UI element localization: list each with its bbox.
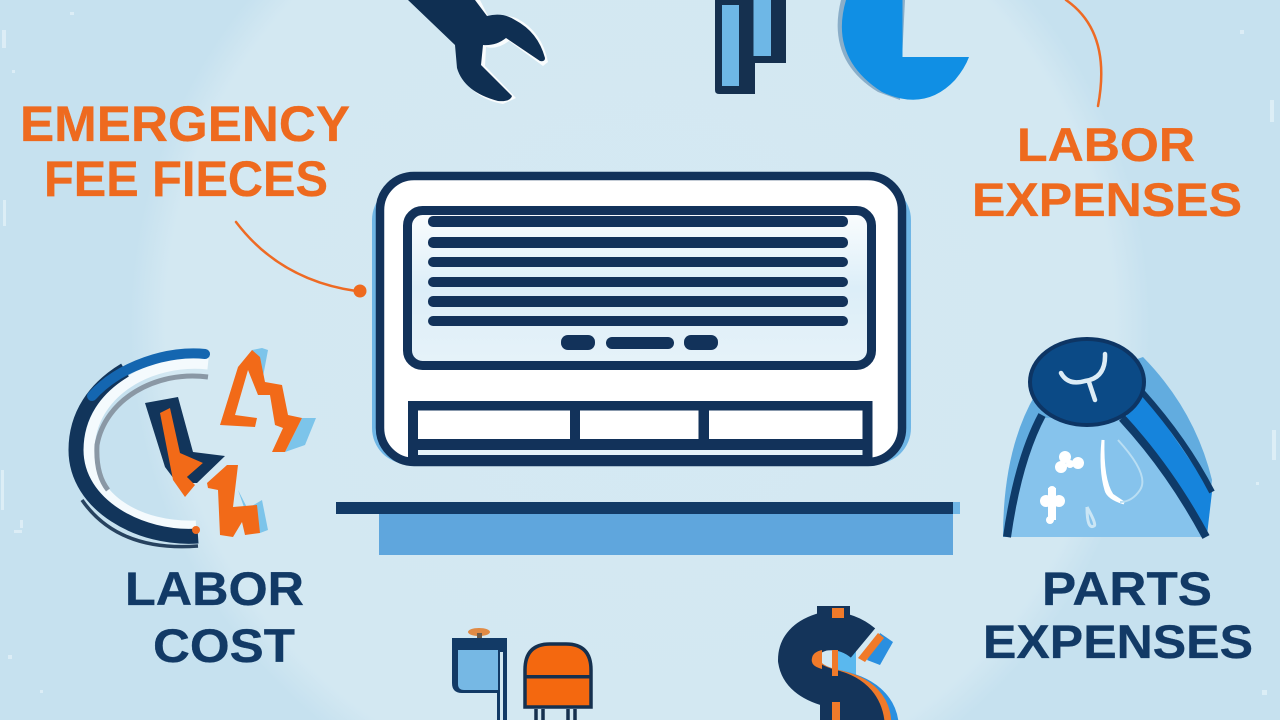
lightning bolts	[285, 418, 316, 452]
heading: labor expenses: LABOR	[1017, 118, 1195, 171]
heading: labor expenses	[972, 118, 1242, 226]
icon: clock with lightning	[76, 348, 316, 547]
lower vent panel	[408, 401, 872, 458]
heading: emergency fee fieces	[20, 96, 350, 207]
icon: pie chart	[838, 0, 969, 100]
icon: gauge	[452, 628, 507, 720]
heading: parts expenses	[983, 562, 1253, 668]
clock hand	[145, 397, 225, 497]
heading: parts expenses: PARTS	[1042, 562, 1212, 615]
air conditioner unit	[372, 176, 911, 464]
shelf	[336, 502, 960, 555]
heading: emergency fee fieces: FEE FIECES	[44, 151, 328, 207]
heading: parts expenses: EXPENSES	[983, 615, 1253, 668]
callout: emergency leader	[236, 222, 366, 298]
icon: parts dome	[1003, 339, 1212, 537]
icon: orange filter	[525, 644, 591, 720]
heading: labor expenses: EXPENSES	[972, 173, 1242, 226]
heading: labor cost: LABOR	[125, 562, 304, 615]
callout: labor expenses leader	[1066, 0, 1101, 106]
grille panel	[408, 210, 872, 366]
heading: labor cost: COST	[153, 619, 295, 672]
icon: bar chart	[715, 0, 786, 94]
icon: wrench	[408, 0, 548, 104]
heading: labor cost	[125, 562, 304, 672]
icon: dollar sign	[778, 606, 898, 720]
heading: emergency fee fieces: EMERGENCY	[20, 96, 350, 152]
